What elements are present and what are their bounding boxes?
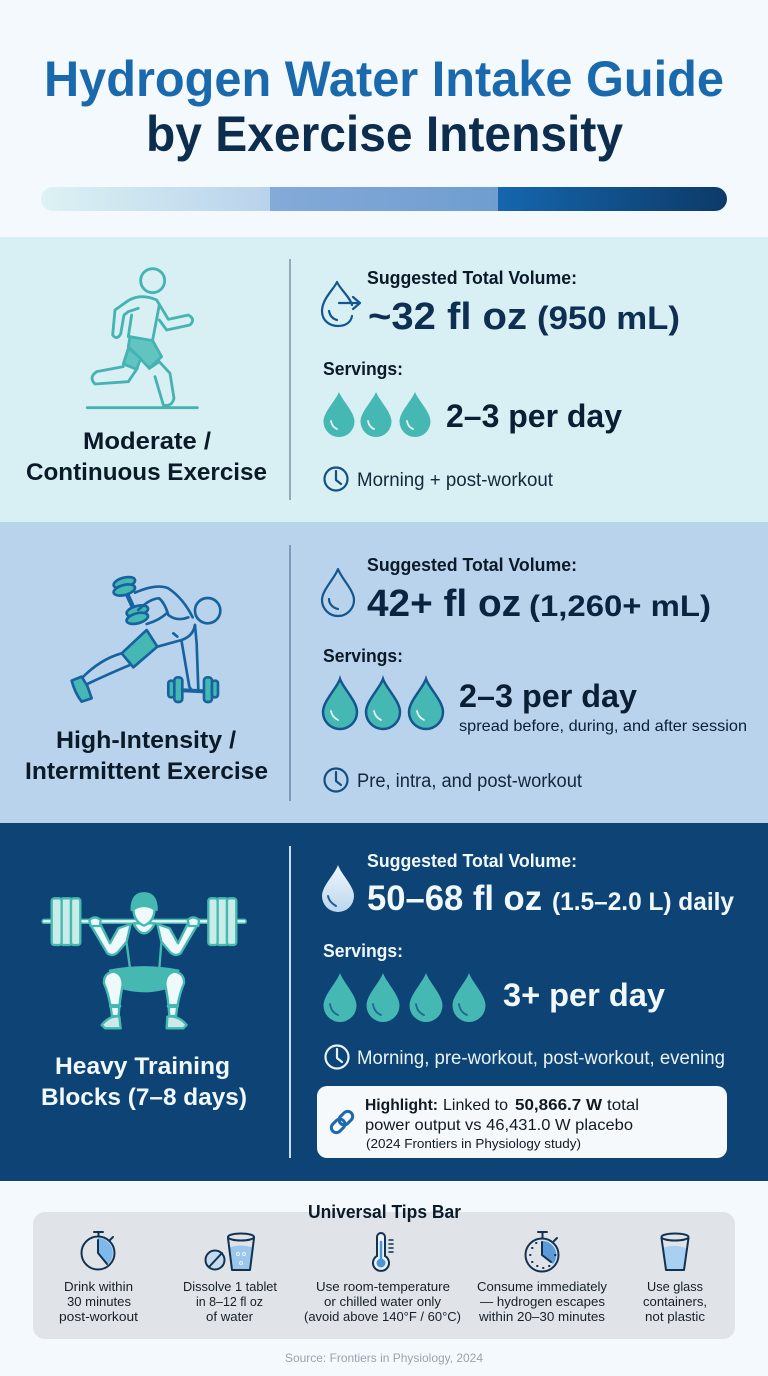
icon: glass — [662, 1234, 688, 1270]
icon: dumbbell lunge — [72, 575, 220, 702]
intensity gradient bar — [41, 187, 727, 211]
tip text — [304, 1279, 461, 1324]
timing text: Pre, intra, and post-workout — [357, 771, 583, 792]
label: suggested volume: Suggested Total Volume: — [367, 555, 577, 575]
highlight text: 50,866.7 W — [515, 1097, 603, 1114]
value: total volume — [367, 583, 711, 625]
tip text: Drink within — [64, 1279, 133, 1294]
heading: high-intensity — [25, 727, 268, 785]
value: total volume: (1.5–2.0 L) daily — [552, 888, 734, 916]
value: servings: 2–3 per day — [446, 398, 622, 434]
value: total volume: 42+ fl oz — [367, 583, 521, 625]
icon: clock — [324, 768, 348, 792]
tip text — [183, 1279, 277, 1324]
icon: dotted stopwatch — [526, 1232, 558, 1272]
heading: moderate: Continuous Exercise — [26, 459, 267, 486]
highlight text: Linked to — [443, 1097, 508, 1114]
tip text: of water — [206, 1309, 254, 1324]
panel: universal tips bar — [33, 1202, 735, 1339]
icon: tablet and glass — [206, 1234, 254, 1270]
icon: stopwatch — [82, 1232, 114, 1270]
tip: water temperature — [304, 1233, 461, 1324]
icon: clock — [324, 468, 348, 490]
icon: runner — [87, 269, 197, 408]
tip text: or chilled water only — [324, 1294, 442, 1309]
icon: link — [329, 1109, 355, 1135]
label: suggested volume: Suggested Total Volume: — [367, 851, 577, 871]
timing text: Morning + post-workout — [357, 470, 554, 491]
panel: high-intensity intermittent exercise — [0, 522, 768, 823]
value: total volume: ~32 fl oz — [368, 296, 527, 338]
label: servings: Servings: — [323, 646, 403, 666]
heading: high-intensity: High-Intensity / — [56, 727, 236, 754]
label: servings: Servings: — [323, 941, 403, 961]
highlight text: total — [607, 1097, 639, 1114]
callout: highlight — [317, 1086, 727, 1158]
panel: moderate continuous exercise — [0, 237, 768, 522]
tip text: within 20–30 minutes — [478, 1309, 606, 1324]
tip text: Consume immediately — [477, 1279, 607, 1294]
heading: moderate — [26, 428, 267, 486]
tip text: in 8–12 fl oz — [196, 1294, 263, 1309]
highlight text: Highlight: — [365, 1097, 438, 1114]
tip text: 30 minutes — [67, 1294, 132, 1309]
value: servings — [459, 678, 747, 735]
value: servings: 2–3 per day — [459, 678, 637, 714]
tip: glass containers — [643, 1234, 707, 1324]
title — [44, 51, 724, 162]
highlight text: power output vs 46,431.0 W placebo — [365, 1117, 633, 1134]
tip: dissolve tablet — [183, 1234, 277, 1324]
tip text — [643, 1279, 707, 1324]
icon: four drops — [324, 973, 486, 1022]
icon: three drops — [324, 392, 430, 437]
icon: filled drop — [322, 865, 354, 912]
value: servings: 3+ per day — [503, 977, 665, 1013]
source: Source: Frontiers in Physiology, 2024 — [285, 1351, 483, 1365]
title: by Exercise Intensity — [146, 106, 623, 162]
value: total volume: 50–68 fl oz — [367, 879, 542, 918]
tip: drink within 30 minutes — [59, 1232, 138, 1324]
highlight text: (2024 Frontiers in Physiology study) — [366, 1136, 581, 1151]
icon: drop with arrow — [322, 282, 360, 326]
timing text: Morning, pre-workout, post-workout, evening — [357, 1048, 725, 1069]
tip text: — hydrogen escapes — [480, 1294, 606, 1309]
tip text — [477, 1279, 607, 1324]
value: total volume: (950 mL) — [537, 300, 680, 336]
tip text: Use room-temperature — [316, 1279, 450, 1294]
label: servings: Servings: — [323, 359, 403, 379]
value: total volume — [368, 296, 680, 338]
heading: moderate: Moderate / — [83, 428, 211, 455]
heading: high-intensity: Intermittent Exercise — [25, 758, 268, 785]
value: total volume — [367, 879, 734, 918]
highlight text — [365, 1097, 639, 1151]
label: suggested volume: Suggested Total Volume: — [367, 268, 577, 288]
tip text: Use glass — [647, 1279, 703, 1294]
icon: clock — [326, 1046, 348, 1068]
tip text — [59, 1279, 138, 1324]
panel: heavy training blocks — [0, 823, 768, 1181]
value: servings: spread before, during, and after session — [459, 718, 747, 735]
tip text: containers, — [643, 1294, 707, 1309]
value: total volume: (1,260+ mL) — [529, 590, 711, 623]
tip: consume immediately — [477, 1232, 607, 1324]
tip text: (avoid above 140°F / 60°C) — [304, 1309, 461, 1324]
tip text: not plastic — [645, 1309, 705, 1324]
heading: heavy training: Heavy Training — [55, 1053, 230, 1080]
icon: outline drop — [322, 569, 354, 616]
heading: heavy training: Blocks (7–8 days) — [41, 1084, 247, 1111]
tip text: Dissolve 1 tablet — [183, 1279, 277, 1294]
icon: barbell squat — [44, 893, 244, 1028]
icon: thermometer — [373, 1233, 393, 1271]
heading: universal tips: Universal Tips Bar — [308, 1202, 461, 1222]
icon: three outlined drops — [323, 679, 443, 729]
heading: heavy training — [41, 1053, 247, 1111]
title: Hydrogen Water Intake Guide — [44, 51, 724, 107]
tip text: post-workout — [59, 1309, 138, 1324]
